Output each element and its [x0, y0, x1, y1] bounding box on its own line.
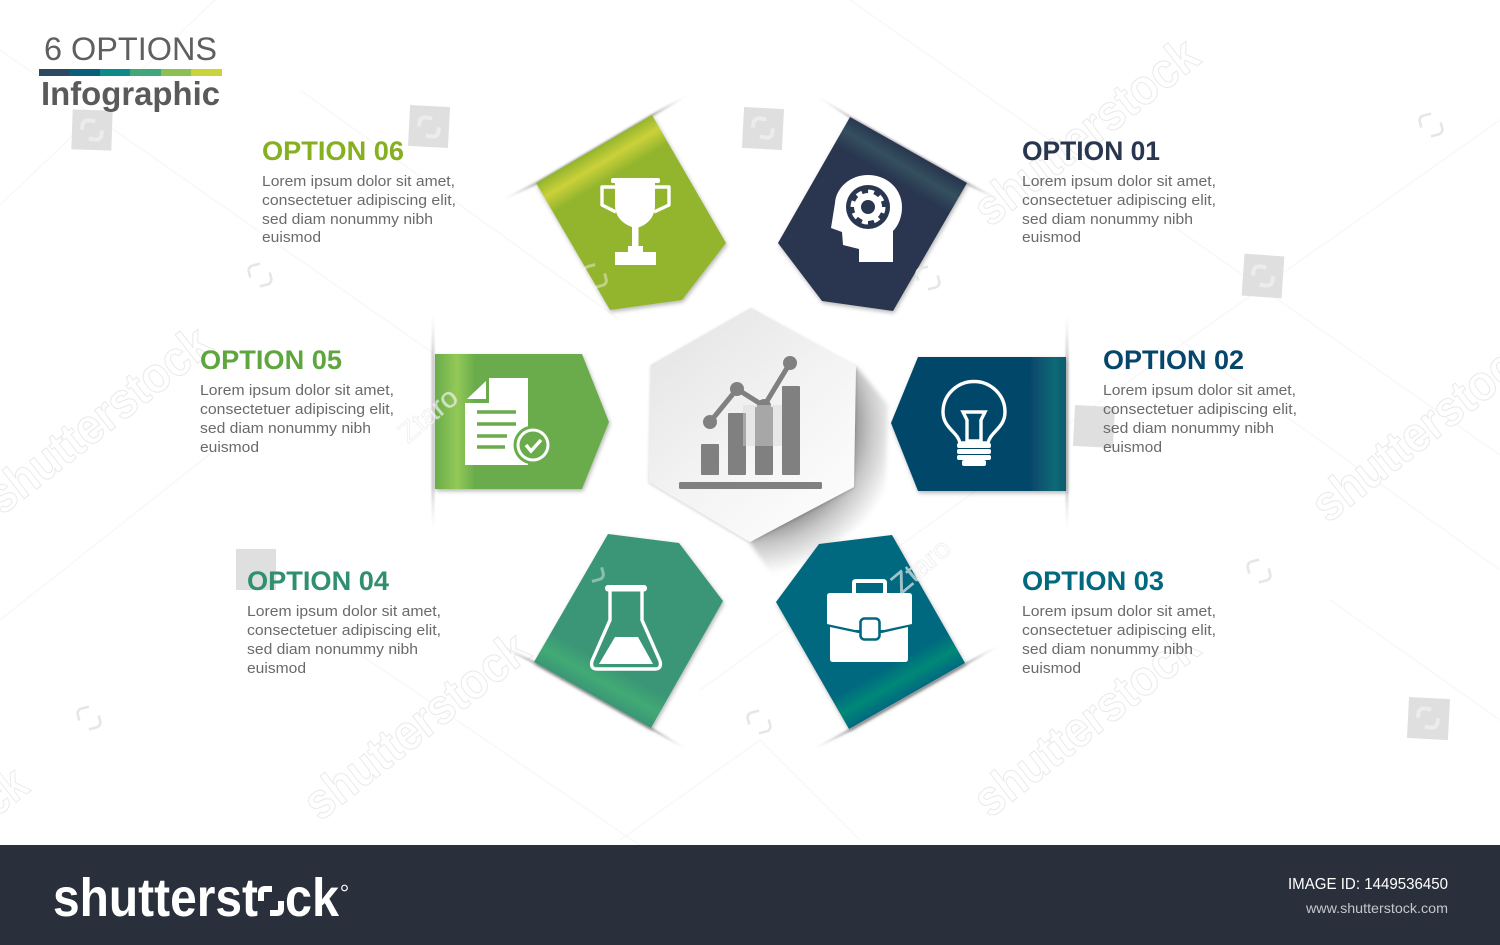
panel: option 05 pentagon with document: [432, 312, 609, 530]
title: Infographic: Infographic: [41, 75, 220, 112]
icon: bar chart with trend line: [679, 356, 822, 489]
icon: briefcase: [827, 581, 912, 662]
text block: option 05: consectetuer adipiscing elit,: [200, 401, 394, 418]
icon: trophy: [602, 178, 669, 265]
text block: option 06: consectetuer adipiscing elit,: [262, 192, 456, 209]
footer bar: [0, 845, 1500, 945]
title block: [39, 31, 222, 112]
text block: option 04: consectetuer adipiscing elit,: [247, 622, 441, 639]
panel: option 02 pentagon with light bulb: [891, 312, 1068, 530]
text block: option 03: consectetuer adipiscing elit,: [1022, 622, 1216, 639]
text block: option 04: OPTION 04: [247, 566, 389, 596]
text block: option 06: OPTION 06: [262, 136, 404, 166]
panel: centre hexagon with chart: [649, 308, 856, 542]
text block: option 04: [247, 566, 441, 677]
text block: option 05: euismod: [200, 439, 259, 456]
text block: option 05: OPTION 05: [200, 345, 342, 375]
text block: option 04: sed diam nonummy nibh: [247, 641, 418, 658]
footer logo: shutterstock: shutterst: [53, 868, 258, 928]
watermark: shutterstock text, top right: shutterstock: [962, 26, 1210, 237]
watermark logo on flask panel: [579, 557, 605, 583]
text block: option 01: [1022, 136, 1216, 246]
text block: option 05: [200, 345, 394, 456]
footer logo: shutterstock: ck: [285, 868, 340, 928]
panel: option 04 pentagon with flask: [500, 534, 723, 750]
watermark: shutterstock text, lower middle: shutterstock: [292, 620, 540, 831]
icon: light bulb: [943, 382, 1005, 466]
text block: option 02: [1103, 345, 1297, 456]
panel: option 03 pentagon with briefcase: [776, 535, 1000, 750]
text block: option 03: sed diam nonummy nibh: [1022, 641, 1193, 658]
text block: option 03: Lorem ipsum dolor sit amet,: [1022, 603, 1216, 620]
text block: option 06: Lorem ipsum dolor sit amet,: [262, 173, 455, 190]
text block: option 03: [1022, 566, 1216, 677]
watermark: Ztaro on option 05: Ztaro: [392, 381, 464, 449]
text block: option 01: OPTION 01: [1022, 136, 1160, 166]
footer url: www.shutterstock.com: [1305, 900, 1448, 916]
text block: option 02: consectetuer adipiscing elit,: [1103, 401, 1297, 418]
text block: option 03: euismod: [1022, 660, 1081, 677]
text block: option 04: euismod: [247, 660, 306, 677]
text block: option 02: Lorem ipsum dolor sit amet,: [1103, 382, 1296, 399]
text block: option 01: Lorem ipsum dolor sit amet,: [1022, 173, 1216, 190]
icon: head with gear: [831, 175, 902, 262]
watermark logos: [71, 105, 1450, 740]
watermark logo beside head panel: [915, 265, 941, 291]
title: 6 OPTIONS: 6 OPTIONS: [44, 31, 217, 67]
panel: option 01 pentagon with head and gear: [778, 95, 1000, 311]
text block: option 05: Lorem ipsum dolor sit amet,: [200, 382, 394, 399]
title colour bar: [39, 69, 222, 76]
centre hexagon cast shadow: [750, 366, 888, 575]
icon: flask: [592, 585, 660, 669]
text block: option 04: Lorem ipsum dolor sit amet,: [247, 603, 441, 620]
watermark logo on trophy panel: [582, 263, 608, 289]
text block: option 03: OPTION 03: [1022, 566, 1164, 596]
text block: option 02: sed diam nonummy nibh: [1103, 420, 1274, 437]
text block: option 01: sed diam nonummy nibh: [1022, 211, 1193, 228]
text block: option 01: consectetuer adipiscing elit,: [1022, 192, 1216, 209]
text block: option 02: euismod: [1103, 439, 1162, 456]
text block: option 05: sed diam nonummy nibh: [200, 420, 371, 437]
icon: document with check: [465, 378, 552, 465]
watermark square on chart: [743, 405, 782, 446]
text block: option 02: OPTION 02: [1103, 345, 1244, 375]
panel: option 06 pentagon with trophy: [502, 95, 726, 310]
footer image id: IMAGE ID: 1449536450: [1288, 876, 1448, 893]
watermark: shutterstock text, lower right: shutterstock: [962, 617, 1210, 828]
text block: option 01: euismod: [1022, 229, 1081, 246]
text block: option 06: euismod: [262, 229, 321, 246]
watermark: Ztaro on option 03: Ztaro: [885, 532, 957, 600]
text block: option 06: sed diam nonummy nibh: [262, 211, 433, 228]
text block: option 06: [262, 136, 456, 246]
